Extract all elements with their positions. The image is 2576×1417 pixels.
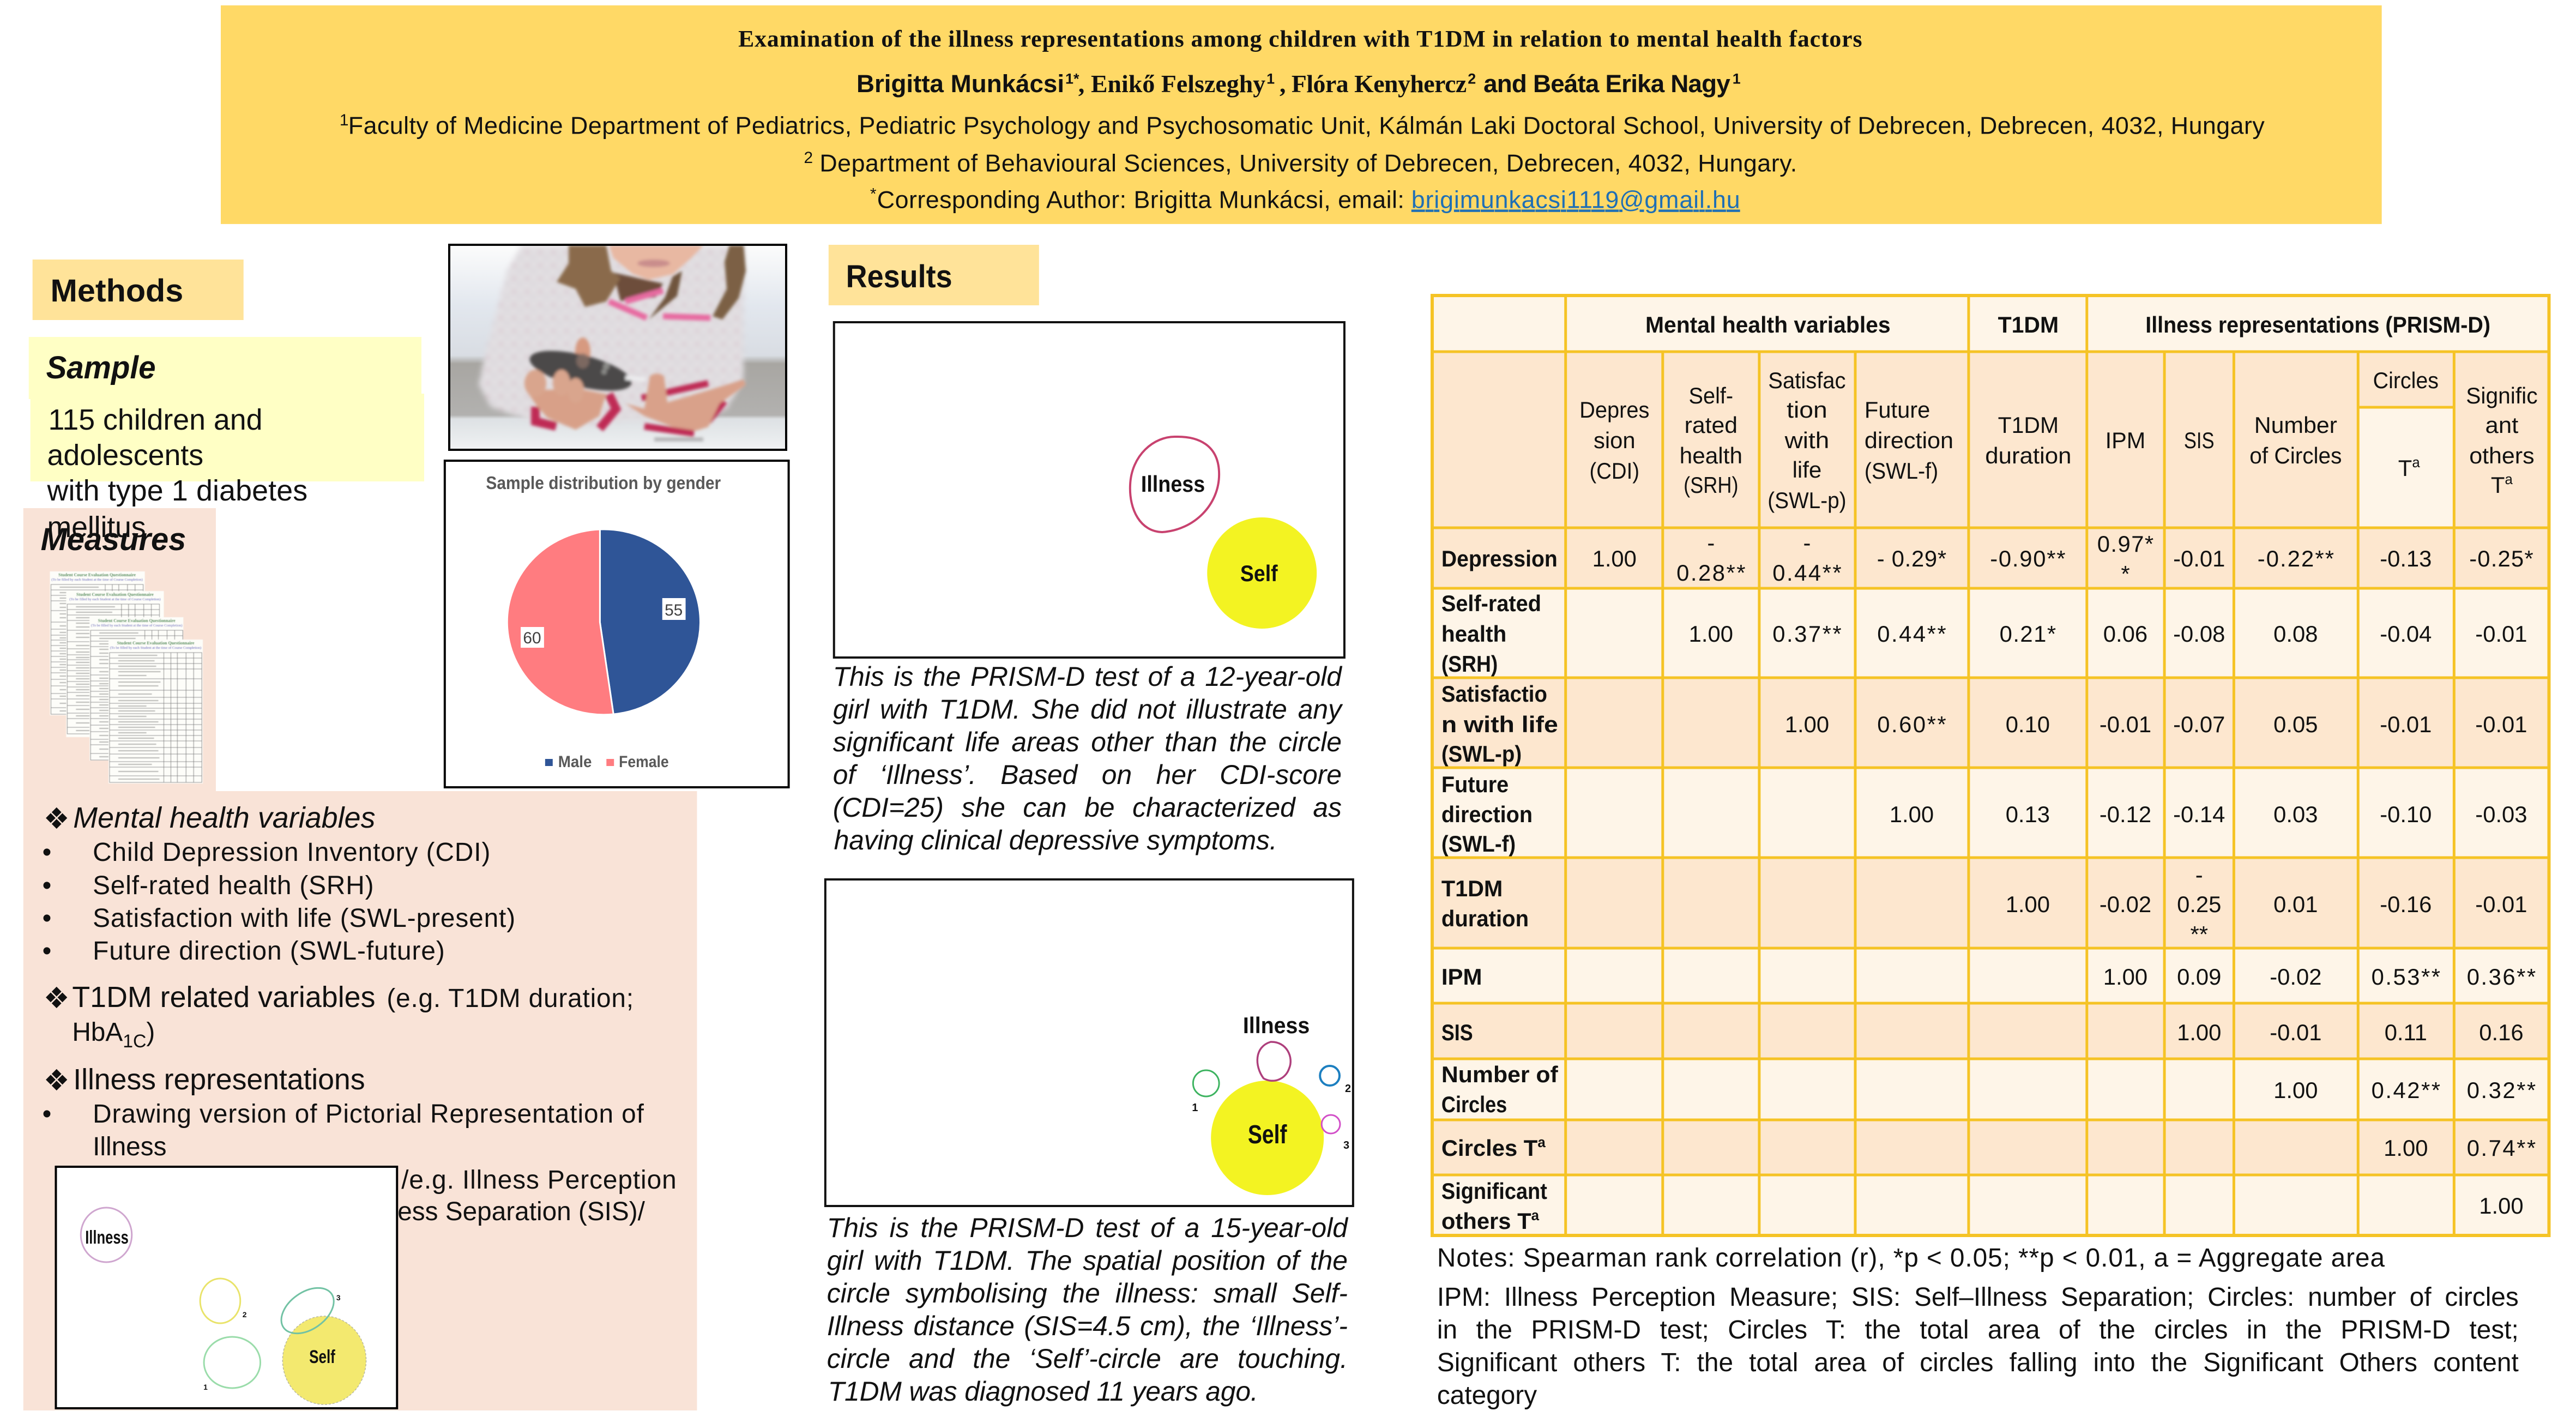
circle 3: 3 (1343, 1139, 1349, 1151)
text block: T1DM related variables: (e.g. T1DM duration; (387, 984, 634, 1013)
table group headers (1645, 312, 2490, 337)
hands and glucose meter (524, 337, 746, 439)
data label: male (662, 598, 686, 620)
affiliation 2: Department of Behavioural Sciences, University of Debrecen, Debrecen, 4032, Hungary. (819, 150, 1797, 177)
table row: Self-rated health: Self-rated (1441, 590, 1541, 616)
table column headers: (SWL-f) (1865, 458, 1938, 484)
text block: illness representations: Drawing version of Pictorial Representation of (93, 1100, 644, 1129)
text block: illness representations: • (43, 1100, 51, 1129)
circle 1 (1192, 1070, 1219, 1114)
table group headers: Mental health variables (1645, 312, 1891, 337)
table note: abbreviations: category (1437, 1381, 1537, 1410)
sample heading: Sample (46, 351, 156, 385)
text block: mental health variables: Self-rated health (SRH) (93, 871, 373, 900)
table row: Future direction: -0.12 (2100, 801, 2151, 827)
table row: Satisfaction with life: -0.01 (2475, 711, 2527, 737)
table row: Self-rated health: 0.06 (2103, 621, 2147, 647)
table row: T1DM duration: duration (1441, 906, 1529, 931)
circle 3 (273, 1279, 342, 1343)
legend (545, 753, 669, 771)
table column headers: duration (1985, 443, 2071, 468)
caption: first PRISM-D test: This is the PRISM-D test of a 12-year-old (833, 661, 1342, 692)
table row: Depression: - (1803, 530, 1811, 556)
caption: second PRISM-D test (827, 1211, 1349, 1376)
icon: stacked questionnaires (50, 571, 203, 783)
text block: mental health variables: • (43, 838, 51, 867)
table column headers: life (1793, 457, 1821, 483)
table row: Future direction: 0.03 (2273, 801, 2318, 827)
text block: illness representations: /e.g. Illness Perception (401, 1166, 677, 1195)
table row: IPM: -0.02 (2270, 964, 2321, 990)
questionnaire page 2: Student Course Evaluation Questionnaire (76, 592, 154, 597)
text block: T1DM related variables: 1C (123, 1031, 146, 1052)
table row: IPM: 0.36** (2467, 964, 2536, 990)
chart title: Sample distribution by gender (486, 473, 721, 493)
table row: Self-rated health: -0.01 (2475, 621, 2527, 647)
text block: illness representations: Illness (93, 1132, 166, 1161)
table column headers: of Circles (2249, 443, 2342, 468)
text block: illness representations (43, 1063, 677, 1226)
illness circle: Illness (1243, 1012, 1310, 1038)
sample text: with type 1 diabetes (47, 474, 307, 507)
text block: mental health variables: ❖ (44, 801, 70, 836)
text block: mental health variables: Child Depression Inventory (CDI) (93, 838, 490, 867)
illness circle (1243, 1012, 1310, 1081)
table row: SIS: 1.00 (2177, 1020, 2221, 1045)
table row: IPM: 1.00 (2103, 964, 2147, 990)
authors: 1 (1266, 70, 1275, 87)
table row: Self-rated health: 0.08 (2273, 621, 2318, 647)
data label: male: 55 (665, 601, 683, 619)
questionnaire page 3 (89, 617, 183, 761)
panel: sample (29, 337, 424, 481)
table row: Self-rated health: 0.37** (1772, 621, 1842, 647)
text block: T1DM related variables: ❖ (44, 981, 70, 1015)
questionnaire page 2: (To be filled by each Student at the time of Course Completion) (69, 598, 161, 601)
questionnaire page 3: Student Course Evaluation Questionnaire (98, 618, 176, 623)
table row: IPM (1441, 964, 2536, 990)
table row: Self-rated health: 0.21* (2000, 621, 2056, 647)
table row: Circles T: a (1537, 1135, 1546, 1150)
table column headers: (SRH) (1684, 472, 1739, 498)
caption: second PRISM-D test: circle and the ‘Self’-circle are touching. (827, 1343, 1348, 1374)
table column headers: direction (1865, 427, 1953, 453)
caption: first PRISM-D test (833, 660, 1343, 825)
authors: 1* (1065, 70, 1079, 87)
table row: Depression: - (1707, 530, 1715, 556)
header banner (221, 5, 2382, 224)
table row: IPM: IPM (1441, 964, 1482, 990)
table row: Satisfaction with life: -0.07 (2173, 711, 2225, 737)
authors: 2 (1468, 70, 1476, 87)
PRISM-D example figure: measures panel (56, 1167, 397, 1408)
table row: Circles T: 0.74** (2467, 1135, 2536, 1161)
circle 2 (200, 1279, 247, 1323)
table row: SIS: -0.01 (2270, 1020, 2321, 1045)
text block: mental health variables: Future direction (SWL-future) (93, 937, 445, 966)
table column headers: (SWL-p) (1767, 487, 1847, 513)
self circle: Self (1240, 560, 1278, 586)
caption last line: second PRISM-D test: T1DM was diagnosed 11 years ago. (828, 1376, 1258, 1407)
self circle (1207, 517, 1317, 629)
table note: abbreviations: in the PRISM-D test; Circles T: the total area of the circles in the PRISM-D test; (1437, 1316, 2519, 1344)
table row: T1DM duration: -0.01 (2475, 891, 2527, 917)
table row: Number of Circles: Circles (1441, 1092, 1507, 1117)
corresponding author: * (870, 185, 877, 203)
table column headers: T (2491, 472, 2505, 498)
self circle: Self (1248, 1120, 1287, 1149)
table row: Satisfaction with life: Satisfactio (1441, 681, 1547, 707)
table column headers: ant (2485, 412, 2519, 438)
table row: Future direction: 0.13 (2006, 801, 2050, 827)
table column headers (1579, 367, 2538, 513)
circle 1: 1 (203, 1383, 208, 1391)
table column headers: Number (2254, 412, 2337, 438)
table group headers: T1DM (1998, 312, 2059, 337)
table row: Satisfaction with life: -0.01 (2100, 711, 2151, 737)
title: Examination of the illness representations among children with T1DM in relation to mental health factors (738, 26, 1862, 52)
illness circle: Illness (1141, 471, 1205, 497)
table row: Satisfaction with life: n with life (1441, 711, 1558, 737)
authors: , Flóra Kenyhercz (1280, 70, 1467, 98)
table row: Self-rated health: -0.08 (2173, 621, 2225, 647)
table row: Satisfaction with life (1441, 681, 2527, 767)
chart panel: sample distribution by gender (445, 461, 789, 787)
text block: mental health variables: Mental health variables (73, 801, 375, 834)
table row: Significant others T: others T (1441, 1208, 1531, 1234)
table column headers: Self- (1689, 383, 1733, 408)
shirt (479, 245, 745, 427)
legend: Male (558, 753, 592, 771)
questionnaire page 2 (66, 591, 164, 737)
table row: Depression: 0.97* (2097, 531, 2153, 557)
circle 2 (1320, 1066, 1351, 1095)
hair and face (557, 245, 746, 319)
sample text: mellitus (47, 511, 146, 544)
table group headers: Illness representations (PRISM-D) (2145, 312, 2490, 337)
table row: Self-rated health (1441, 590, 2527, 677)
caption: first PRISM-D test: significant life areas other than the circle (833, 727, 1342, 757)
PRISM-D example figure 2 (825, 879, 1353, 1206)
text block: mental health variables: • (43, 937, 51, 966)
table note: statistics: Notes: Spearman rank correlation (r), *p < 0.05; **p < 0.01, a = Aggregate area (1437, 1244, 2385, 1273)
right column: results figures (825, 245, 1353, 1407)
table row: T1DM duration: 0.01 (2273, 891, 2318, 917)
table row: Depression: -0.90** (1990, 546, 2066, 571)
table note: abbreviations (1437, 1281, 2521, 1417)
heading: Results: Results (846, 260, 952, 294)
table row: T1DM duration: -0.16 (2380, 891, 2432, 917)
table row: Self-rated health: (SRH) (1441, 651, 1498, 677)
affiliation 2: 2 (804, 149, 813, 167)
questionnaire page 1: (To be filled by each Student at the time of Course Completion) (51, 578, 143, 582)
sample text (47, 403, 307, 544)
text block: mental health variables (43, 801, 515, 966)
heading: Results (829, 245, 1039, 305)
table row: Future direction: Future (1441, 771, 1509, 797)
table row: Depression: * (2121, 561, 2130, 587)
table column headers: IPM (2106, 427, 2145, 453)
table column headers: health (1680, 443, 1742, 468)
table column headers: Satisfac (1768, 367, 1846, 393)
table row: Future direction: -0.14 (2173, 801, 2225, 827)
table row: Self-rated health: health (1441, 621, 1506, 647)
table row: Number of Circles: 0.32** (2467, 1077, 2536, 1103)
table row: T1DM duration: 1.00 (2006, 891, 2050, 917)
table row: IPM: 0.09 (2177, 964, 2221, 990)
circle 3 (1322, 1115, 1349, 1151)
table column headers: a (2412, 455, 2420, 471)
table row: Depression: -0.25* (2469, 546, 2533, 571)
table column headers: Future (1865, 397, 1930, 423)
text block: illness representations: ❖ (44, 1063, 70, 1098)
corresponding author: Corresponding Author: Brigitta Munkácsi, email: (877, 187, 1404, 213)
questionnaire page 1: Student Course Evaluation Questionnaire (58, 572, 136, 577)
table row: Depression: -0.13 (2380, 546, 2432, 571)
sample text: 115 children and (49, 403, 263, 436)
table column headers: Depres (1579, 397, 1649, 423)
table row: Number of Circles: 0.42** (2372, 1077, 2440, 1103)
questionnaire page 3: (To be filled by each Student at the time of Course Completion) (91, 624, 182, 628)
text block: mental health variables: • (43, 871, 51, 900)
table row: T1DM duration (1441, 862, 2527, 947)
authors: Brigitta Munkácsi (856, 70, 1064, 98)
text block: illness representations: Self-Illness Separation (SIS)/ (311, 1197, 645, 1226)
table row: Satisfaction with life: 0.10 (2006, 711, 2050, 737)
heading: Methods: Methods (51, 274, 183, 309)
table column headers: (CDI) (1589, 458, 1639, 484)
authors: 1 (1733, 70, 1741, 87)
self circle (1211, 1081, 1324, 1195)
table row: SIS: 0.16 (2479, 1020, 2524, 1045)
circle 2: 2 (1345, 1083, 1351, 1095)
circle 1: 1 (1192, 1102, 1198, 1114)
table row: Future direction: -0.10 (2380, 801, 2432, 827)
table notes (1437, 1244, 2521, 1417)
photo: child testing blood glucose (449, 245, 786, 450)
caption: first PRISM-D test: (CDI=25) she can be characterized as (833, 792, 1342, 823)
table row: Depression: - 0.29* (1877, 546, 1946, 571)
corresponding author (870, 185, 1740, 213)
table row: Number of Circles: 1.00 (2273, 1077, 2318, 1103)
questionnaire page 4: (To be filled by each Student at the time of Course Completion) (110, 646, 201, 650)
table row: Significant others T: 1.00 (2479, 1193, 2524, 1219)
caption: first PRISM-D test: of ‘Illness’. Based on her CDI-score (833, 759, 1342, 790)
legend: Female (619, 753, 669, 771)
table row: Number of Circles: Number of (1441, 1062, 1559, 1087)
text block: T1DM related variables: T1DM related variables (72, 981, 375, 1014)
table column headers: others (2469, 443, 2535, 468)
table note: abbreviations: IPM: Illness Perception Measure; SIS: Self–Illness Separation; Circles: number of circles (1437, 1283, 2519, 1312)
table row: Depression: 1.00 (1592, 546, 1637, 571)
corresponding author: brigimunkacsi1119@gmail.hu (1411, 187, 1740, 213)
table row: Depression: Depression (1441, 546, 1558, 571)
caption: second PRISM-D test: This is the PRISM-D test of a 15-year-old (827, 1213, 1348, 1243)
table column headers: sion (1594, 427, 1636, 453)
table row: Future direction: -0.03 (2475, 801, 2527, 827)
table row: Future direction: direction (1441, 801, 1533, 827)
correlation table (1432, 296, 2549, 1235)
data label: female: 60 (523, 629, 541, 647)
table row: Circles T: Circles T (1441, 1135, 1537, 1161)
table row: T1DM duration: 0.25 (2177, 891, 2221, 917)
table row: Significant others T: Significant (1441, 1178, 1547, 1204)
table note: abbreviations: Significant others T: the total area of circles falling into the Significant Others content (1437, 1348, 2519, 1377)
caption: first PRISM-D test: girl with T1DM. She did not illustrate any (833, 694, 1342, 725)
questionnaire page 4 (108, 640, 203, 783)
table row: Satisfaction with life: 0.05 (2273, 711, 2318, 737)
left column: methods (23, 260, 789, 1410)
table grid (1432, 296, 2549, 1235)
text block: T1DM related variables: HbA (72, 1018, 123, 1047)
panel: measures background (23, 508, 697, 1410)
text block: mental health variables: • (43, 904, 51, 933)
table column headers: T1DM (1998, 412, 2059, 438)
circle 3: 3 (336, 1293, 341, 1302)
table column headers: a (2505, 472, 2513, 487)
authors (856, 70, 1741, 98)
caption last line: first PRISM-D test: having clinical depressive symptoms. (834, 825, 1277, 855)
affiliation 1: Faculty of Medicine Department of Pediatrics, Pediatric Psychology and Psychosomatic Unit, Kálmán Laki Doctoral School, University of Debrecen, Debrecen, 4032, Hungary (348, 113, 2265, 140)
table row: Circles T (1441, 1135, 2536, 1161)
table row fills (1432, 296, 2549, 1235)
sample text: adolescents (47, 439, 203, 472)
photo frame (449, 245, 786, 450)
authors: , Enikő Felszeghy (1078, 70, 1265, 98)
table column headers: T (2398, 455, 2412, 481)
table row: T1DM duration: T1DM (1441, 876, 1503, 901)
table row: SIS (1441, 1020, 2524, 1045)
table row: Number of Circles (1441, 1062, 2536, 1117)
table row: T1DM duration: -0.02 (2100, 891, 2151, 917)
caption: second PRISM-D test: circle symbolising the illness: small Self- (827, 1278, 1348, 1309)
data label: female (521, 627, 544, 648)
questionnaire page 4: Student Course Evaluation Questionnaire (117, 641, 195, 646)
table row: Self-rated health: -0.04 (2380, 621, 2432, 647)
table row: Significant others T: a (1531, 1208, 1540, 1223)
affiliation 1: 1 (340, 111, 348, 129)
table column headers: Signific (2466, 383, 2538, 408)
circle 1 (203, 1337, 261, 1391)
table row: Satisfaction with life: (SWL-p) (1441, 741, 1522, 767)
caption: second PRISM-D test: girl with T1DM. The spatial position of the (827, 1245, 1348, 1276)
table column headers: SIS (2184, 427, 2215, 453)
table row: Depression: 0.44** (1772, 560, 1842, 586)
table row: Future direction: (SWL-f) (1441, 831, 1516, 857)
PRISM-D example figure 1 (834, 322, 1344, 658)
caption: second PRISM-D test: Illness distance (SIS=4.5 cm), the ‘Illness’- (827, 1311, 1348, 1341)
text block: mental health variables: Satisfaction with life (SWL-present) (93, 904, 515, 933)
table row: SIS: SIS (1441, 1020, 1473, 1045)
text block: T1DM related variables (44, 981, 634, 1052)
table row: Satisfaction with life: 0.60** (1877, 711, 1946, 737)
table row: Future direction (1441, 771, 2527, 857)
table row: Future direction: 1.00 (1890, 801, 1934, 827)
illness circle (1130, 437, 1219, 532)
table row: Circles T: 1.00 (2384, 1135, 2428, 1161)
table row: Depression (1441, 530, 2533, 587)
questionnaire page 1 (50, 571, 145, 715)
table row: Depression: -0.22** (2258, 546, 2334, 571)
table column headers: Circles (2373, 367, 2439, 393)
table row: IPM: 0.53** (2372, 964, 2440, 990)
pie chart (507, 529, 700, 715)
text block: T1DM related variables: ) (146, 1018, 155, 1047)
table column headers: tion (1787, 397, 1827, 423)
measures heading: Measures (41, 522, 186, 557)
table row: Satisfaction with life: -0.01 (2380, 711, 2432, 737)
heading: Methods (33, 260, 244, 320)
self circle (282, 1316, 366, 1404)
table row: SIS: 0.11 (2385, 1020, 2427, 1045)
illness circle: Illness (85, 1227, 129, 1248)
authors: and Beáta Erika Nagy (1483, 70, 1730, 98)
table column headers: with (1784, 427, 1829, 453)
table row: T1DM duration: ** (2190, 921, 2208, 947)
self circle: Self (309, 1347, 335, 1367)
table row: T1DM duration: - (2195, 862, 2203, 888)
table row: Significant others T (1441, 1178, 2524, 1234)
text block: illness representations: Illness representations (73, 1063, 365, 1096)
table row: Depression: -0.01 (2173, 546, 2225, 571)
table column headers: rated (1685, 412, 1738, 438)
table row: Self-rated health: 1.00 (1689, 621, 1733, 647)
table row: Depression: 0.28** (1676, 560, 1746, 586)
circle 2: 2 (243, 1310, 247, 1319)
table row: Satisfaction with life: 1.00 (1785, 711, 1829, 737)
illness circle (81, 1208, 132, 1262)
table row: Self-rated health: 0.44** (1877, 621, 1946, 647)
